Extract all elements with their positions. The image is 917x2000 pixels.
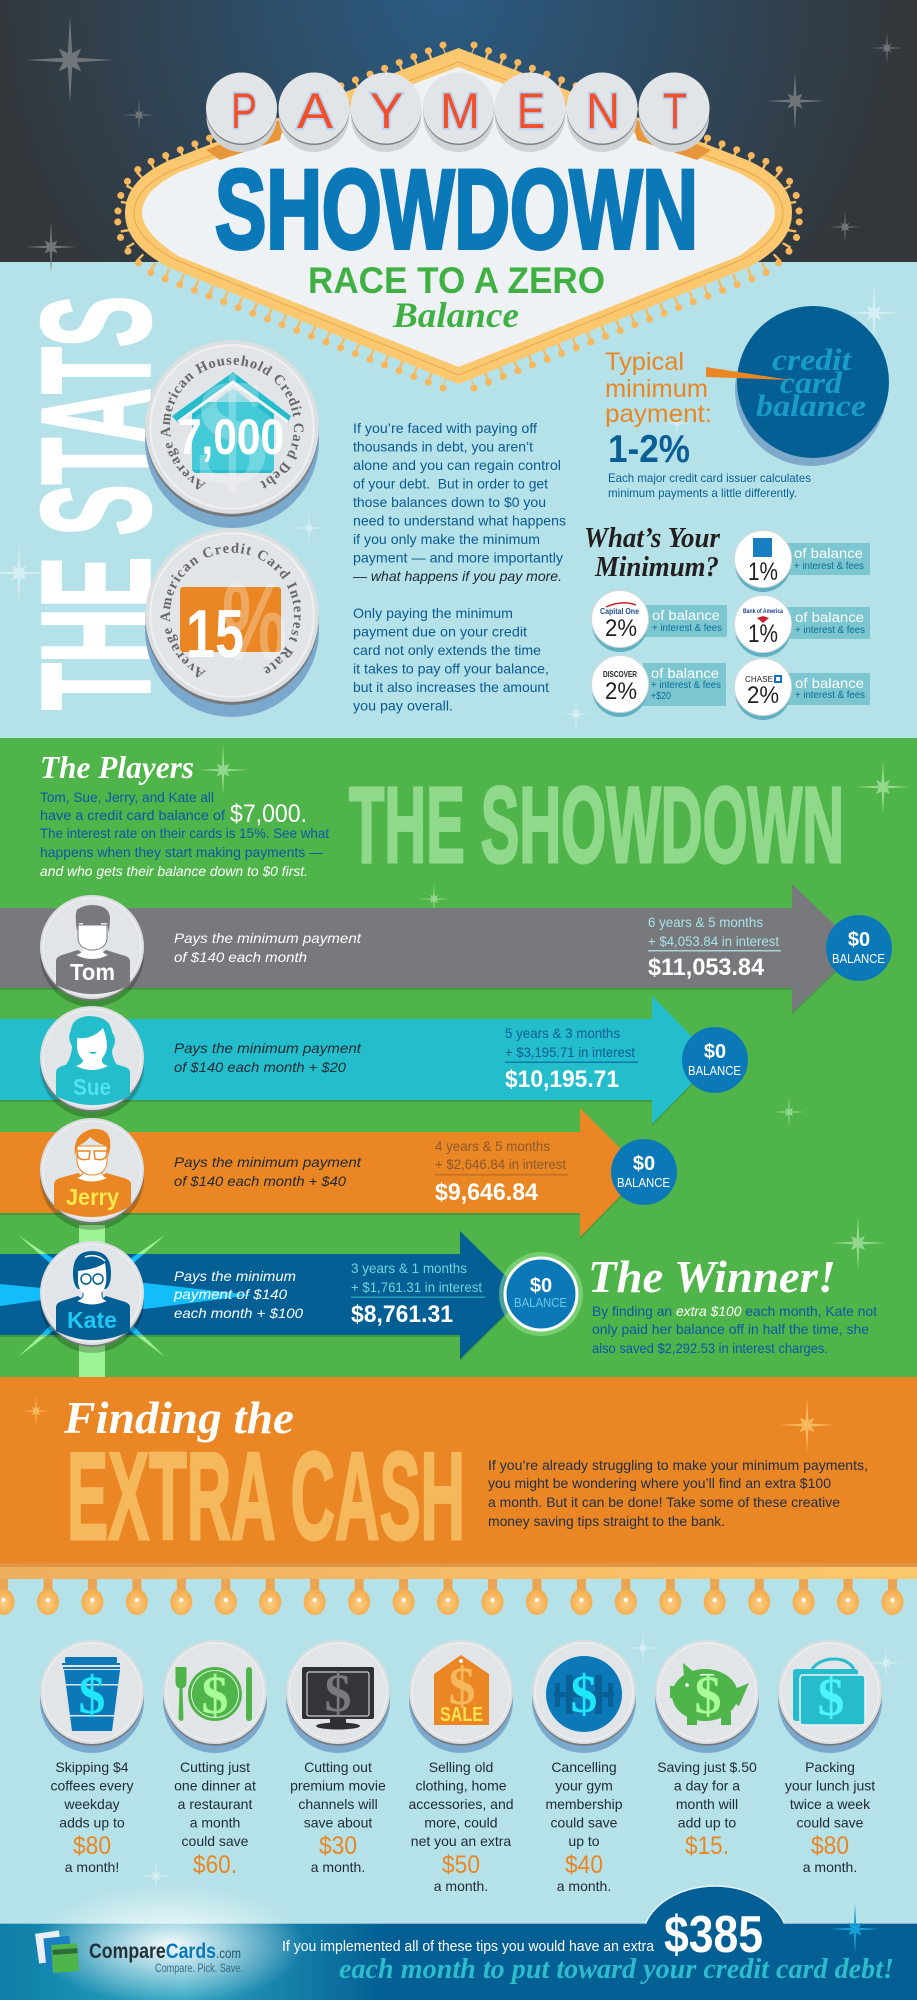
section stars [20, 1395, 835, 1453]
badge: discover 2%: DISCOVER [603, 670, 637, 679]
heading: the winner: The Winner! [588, 1251, 836, 1302]
text block: players intro: happens when they start making payments — [40, 844, 323, 860]
text block: winner: only paid her balance off in half the time, she [592, 1321, 869, 1337]
badge: chase 2%: CHASE [745, 675, 773, 684]
tip: packed lunch [778, 1640, 882, 1875]
payoff figures: + $4,053.84 in interest [648, 933, 779, 949]
text block: intro paragraphs: — what happens if you pay more. [352, 568, 562, 584]
zero balance badge [826, 915, 892, 981]
logo: comparecards: CompareCards [89, 1940, 216, 1963]
letter discs: PAYMENT: P [231, 83, 257, 139]
tip text: $60. [193, 1851, 237, 1879]
badge: capital one 2%: Capital One [600, 607, 639, 616]
tip text: a month! [65, 1859, 119, 1875]
zero balance badge: BALANCE [688, 1064, 741, 1078]
tip: dinner [163, 1640, 267, 1879]
payoff figures: $8,761.31 [351, 1301, 453, 1328]
tip text: net you an extra [411, 1833, 511, 1849]
tip text: Cancelling [551, 1759, 617, 1775]
text block: intro paragraphs: of your debt. But in order to get [353, 476, 548, 492]
text block: players intro: have a credit card balance of [40, 807, 225, 823]
callout: typical minimum payment [605, 348, 811, 500]
kate winner rays [18, 1225, 165, 1377]
tip text [408, 1759, 514, 1894]
credit card balance pie [706, 306, 889, 466]
text block: intro paragraphs: alone and you can regain control [353, 457, 561, 473]
arrow: sue [0, 996, 748, 1126]
text block: intro paragraphs: Only paying the minimum [353, 605, 513, 621]
tip text: a month [190, 1814, 240, 1830]
description: of $140 each month [174, 949, 307, 965]
tip text: Cutting just [180, 1759, 250, 1775]
curved label: Average American Credit Card Interest Rate [160, 542, 301, 678]
heading: what's your minimum: What’s Your [584, 522, 721, 554]
text block: intro paragraphs: payment — and more importantly [353, 550, 563, 566]
panel: the showdown green background [0, 738, 917, 1377]
marquee light bulbs [0, 1579, 904, 1615]
zero balance badge: $0 [704, 1041, 726, 1063]
total: $385: $385 [664, 1906, 763, 1964]
tip text: $40 [565, 1851, 603, 1879]
footer tagline: each month to put toward your credit card debt! [339, 1954, 894, 1985]
heading: what's your minimum: Minimum? [594, 551, 719, 583]
tip text: channels will [298, 1796, 378, 1812]
percent range: 1-2% [608, 428, 690, 471]
note: Each major credit card issuer calculates [608, 471, 811, 485]
callout: typical minimum payment: minimum [605, 375, 708, 403]
text block: extra cash intro: a month. But it can be done! Take some of these creative [488, 1494, 840, 1510]
panel: footer [0, 1885, 917, 2000]
badge: american express 1%: 1% [748, 558, 778, 586]
credit card balance pie: balance [756, 388, 866, 423]
tip text: add up to [678, 1814, 736, 1830]
tip text: Selling old [429, 1759, 493, 1775]
tip text: weekday [63, 1796, 120, 1812]
text block: intro paragraphs: need to understand what happens [353, 512, 566, 528]
curved label: Average American Household Credit Card Debt [160, 355, 304, 490]
zero balance badge winner [499, 1252, 583, 1336]
heading: finding the: Finding the [63, 1392, 294, 1443]
zero balance badge: $0 [633, 1153, 655, 1175]
tip text: twice a week [790, 1796, 871, 1812]
sign face [142, 67, 775, 367]
text block: intro paragraphs: card not only extends the time [353, 642, 541, 658]
text block: extra cash intro: money saving tips straight to the bank. [488, 1513, 725, 1529]
coin: sue: Sue [73, 1074, 111, 1100]
title: SHOWDOWN: SHOWDOWN [215, 147, 698, 272]
credit card balance pie: card [780, 365, 843, 400]
callout: typical minimum payment: Typical [605, 348, 684, 376]
text block: intro paragraphs: but it also increases the amount [353, 679, 549, 695]
coin: kate [40, 1241, 144, 1353]
zero balance badge winner: BALANCE [514, 1296, 567, 1310]
panel: finding the extra cash [0, 1377, 917, 1579]
text block: extra cash intro: If you’re already struggling to make your minimum payments, [488, 1457, 868, 1473]
logo: comparecards [35, 1930, 243, 1975]
panel: night sky header [0, 0, 917, 272]
payoff figures: + $2,646.84 in interest [435, 1156, 566, 1172]
tip text [657, 1759, 757, 1860]
icon: sale tag: $ [448, 1656, 476, 1716]
icon: dumbbell: $ [570, 1664, 598, 1724]
logo: comparecards: .com [216, 1945, 241, 1961]
panel: the stats background stars [0, 286, 901, 730]
faded percent: % [222, 561, 287, 684]
footer star [830, 1904, 880, 1954]
letter discs: PAYMENT [206, 72, 710, 152]
subtitle: race to a zero: RACE TO A ZERO [308, 260, 605, 301]
payoff figures: + $3,195.71 in interest [505, 1044, 635, 1060]
icon: coffee cup: $ [78, 1665, 106, 1725]
heading: what's your minimum [584, 522, 721, 583]
text block: intro paragraphs: payment due on your credit [353, 624, 527, 640]
text block: intro paragraphs: thousands in debt, you aren’t [353, 438, 533, 454]
text block: intro paragraphs [352, 420, 566, 714]
tip text: $15. [685, 1832, 729, 1860]
panel: finding the extra cash: EXTRA CASH [67, 1428, 465, 1566]
description: Pays the minimum [174, 1268, 296, 1284]
icon: piggy bank: $ [694, 1665, 722, 1725]
payoff figures: $9,646.84 [435, 1179, 539, 1206]
badge: american express 1%: of balance [794, 545, 863, 561]
letter discs: PAYMENT: A [297, 83, 334, 139]
casino sign [117, 45, 800, 388]
text block: winner: By finding an extra $100 each month, Kate not [592, 1303, 877, 1319]
tip text: your gym [555, 1778, 613, 1794]
payoff figures [351, 1260, 485, 1328]
tip text: Packing [805, 1759, 855, 1775]
zero balance badge: BALANCE [832, 952, 885, 966]
tip text: a month. [803, 1859, 857, 1875]
payoff figures [505, 1025, 638, 1093]
text block: intro paragraphs: if you only make the minimum [353, 531, 540, 547]
badge: discover 2%: 2% [605, 678, 637, 705]
arrow: tom [0, 884, 892, 1015]
subtitle: balance: Balance [392, 295, 519, 335]
text block: intro paragraphs: those balances down to $0 you [353, 494, 546, 510]
tip: piggy bank [655, 1640, 759, 1860]
tip text: $50 [442, 1851, 480, 1879]
tip text: could save [551, 1814, 618, 1830]
text block: winner [592, 1303, 877, 1356]
badge: capital one 2% [592, 590, 727, 652]
zero balance badge [611, 1139, 677, 1205]
payoff figures: 6 years & 5 months [648, 914, 763, 930]
wedge pointer [706, 367, 790, 380]
tip: gym membership [532, 1640, 636, 1894]
tip text: accessories, and [408, 1796, 514, 1812]
header stars [26, 16, 903, 272]
description [174, 1040, 362, 1075]
badge: bank of america 1% [734, 596, 870, 657]
credit card balance pie: credit [772, 342, 853, 377]
zero balance badge winner: $0 [530, 1275, 552, 1297]
badge: chase 2%: 2% [747, 682, 779, 709]
tip text: your lunch just [785, 1778, 875, 1794]
badge: discover 2%: +$20 [651, 691, 671, 702]
badge: american express 1% [734, 530, 870, 592]
tip text: a day for a [674, 1778, 740, 1794]
tip text: Saving just $.50 [657, 1759, 757, 1775]
text block: extra cash intro: you might be wondering where you’ll find an extra $100 [488, 1475, 831, 1491]
zero balance badge [682, 1027, 748, 1093]
value: 15 [186, 596, 244, 672]
text block: players intro: and who gets their balance down to $0 first. [40, 863, 308, 879]
heading: the players: The Players [40, 749, 194, 785]
tip text: Cutting out [304, 1759, 372, 1775]
tip text: $80 [811, 1832, 849, 1860]
tip text [290, 1759, 386, 1875]
sign frame [125, 48, 792, 384]
zero balance badge: BALANCE [617, 1176, 670, 1190]
description [174, 930, 362, 965]
payoff figures [435, 1138, 568, 1206]
text block: intro paragraphs: If you’re faced with paying off [353, 420, 537, 436]
tip text: adds up to [59, 1814, 125, 1830]
coin: interest rate [145, 528, 319, 717]
text block: players intro: The interest rate on their cards is 15%. See what [40, 825, 329, 841]
icon: plate and cutlery: $ [202, 1665, 228, 1725]
tip text: a month. [434, 1878, 488, 1894]
letter discs: PAYMENT: Y [370, 83, 403, 139]
house icon [172, 372, 291, 473]
badge: chase 2%: of balance [795, 675, 864, 691]
icon: sale tag [434, 1655, 489, 1726]
balance amount: $7,000. [230, 800, 307, 828]
description [173, 1268, 303, 1321]
description: Pays the minimum payment [174, 930, 362, 946]
badge: capital one 2%: 2% [605, 615, 637, 642]
coin: jerry: Jerry [66, 1184, 119, 1210]
letter discs: PAYMENT: N [586, 83, 620, 139]
description: of $140 each month + $40 [174, 1173, 346, 1189]
tip text [545, 1759, 623, 1894]
tip: movie channels [286, 1640, 390, 1875]
callout: typical minimum payment: payment: [605, 400, 712, 428]
badge: bank of america 1%: 1% [748, 620, 778, 648]
payoff figures: 3 years & 1 months [351, 1260, 467, 1276]
tip: selling old things [408, 1640, 514, 1894]
tip text: a month. [557, 1878, 611, 1894]
callout: typical minimum payment: minimum payments a little differently. [608, 486, 797, 500]
badge: chase 2%: + interest & fees [795, 690, 865, 701]
icon: television: $ [324, 1663, 352, 1723]
badge: capital one 2%: of balance [652, 607, 720, 623]
tip text: Skipping $4 [55, 1759, 129, 1775]
showdown stars [198, 745, 910, 1270]
arrow: jerry [0, 1108, 677, 1239]
badge: bank of america 1%: Bank of America [743, 608, 783, 615]
tip text: premium movie [290, 1778, 386, 1794]
description: of $140 each month + $20 [174, 1059, 346, 1075]
coin: jerry [40, 1118, 144, 1230]
text block: players intro [40, 789, 329, 879]
badge: capital one 2%: + interest & fees [652, 623, 722, 634]
badge: american express 1%: + interest & fees [794, 561, 864, 572]
badge: bank of america 1%: of balance [795, 609, 864, 625]
coin: tom: Tom [70, 959, 115, 985]
tip text: a month. [311, 1859, 365, 1875]
tip text [174, 1759, 256, 1879]
payoff figures: 5 years & 3 months [505, 1025, 620, 1041]
coin: sue [40, 1006, 144, 1118]
tip text: clothing, home [415, 1778, 507, 1794]
tip text [785, 1759, 875, 1875]
text block: players intro: Tom, Sue, Jerry, and Kate all [40, 789, 214, 805]
tip: coffee [40, 1640, 144, 1875]
footer sentence: If you implemented all of these tips you would have an extra [282, 1938, 655, 1955]
badge: discover 2%: of balance [651, 665, 719, 681]
letter discs: PAYMENT: E [517, 83, 545, 139]
text block: intro paragraphs: you pay overall. [353, 698, 453, 714]
badge: chase 2% [734, 658, 870, 720]
badge: bank of america 1%: + interest & fees [795, 625, 865, 636]
logo: comparecards: Compare. Pick. Save. [155, 1961, 243, 1975]
payoff figures: 4 years & 5 months [435, 1138, 550, 1154]
faded dollar: $ [194, 349, 270, 515]
icon: sale tag: SALE [440, 1704, 483, 1726]
description: each month + $100 [174, 1305, 303, 1321]
tip text: more, could [424, 1814, 498, 1830]
tip text: one dinner at [174, 1778, 256, 1794]
icon: lunch bag: $ [818, 1667, 844, 1727]
tip text: up to [568, 1833, 600, 1849]
payoff figures: $10,195.71 [505, 1066, 619, 1093]
payoff figures: + $1,761.31 in interest [351, 1279, 482, 1295]
description: Pays the minimum payment [174, 1154, 362, 1170]
description: payment of $140 [173, 1286, 287, 1302]
tip text: could save [182, 1833, 249, 1849]
tip text: could save [797, 1814, 864, 1830]
tip text: month will [676, 1796, 738, 1812]
coin: household credit card debt [145, 340, 319, 528]
text block: winner: also saved $2,292.53 in interest charges. [592, 1340, 828, 1356]
tips stars [140, 1633, 902, 1892]
badge: discover 2%: + interest & fees [651, 680, 721, 691]
letter shadow [206, 118, 285, 160]
tip text: $30 [319, 1832, 357, 1860]
coin: tom [40, 895, 144, 1007]
description [174, 1154, 362, 1189]
letter discs: PAYMENT: M [440, 83, 480, 139]
value: 7,000 [178, 409, 284, 465]
payoff figures [648, 914, 781, 981]
tip text: coffees every [50, 1778, 134, 1794]
sign bulbs [117, 45, 800, 388]
tip text: membership [545, 1796, 623, 1812]
coin: kate: Kate [67, 1307, 117, 1333]
tip text [50, 1759, 134, 1875]
tip text: $80 [73, 1832, 111, 1860]
zero balance badge: $0 [848, 929, 870, 951]
text block: extra cash intro [488, 1457, 868, 1529]
description: Pays the minimum payment [174, 1040, 362, 1056]
tip text: a restaurant [178, 1796, 252, 1812]
orange card [180, 587, 281, 652]
letter discs: PAYMENT: T [663, 83, 687, 139]
arrow: kate [0, 1231, 583, 1361]
tip text: save about [304, 1814, 372, 1830]
payoff figures: $11,053.84 [648, 954, 765, 981]
text block: intro paragraphs: it takes to pay off your balance, [353, 660, 549, 676]
badge: discover 2% [592, 656, 726, 717]
arrow rays [0, 1254, 252, 1335]
